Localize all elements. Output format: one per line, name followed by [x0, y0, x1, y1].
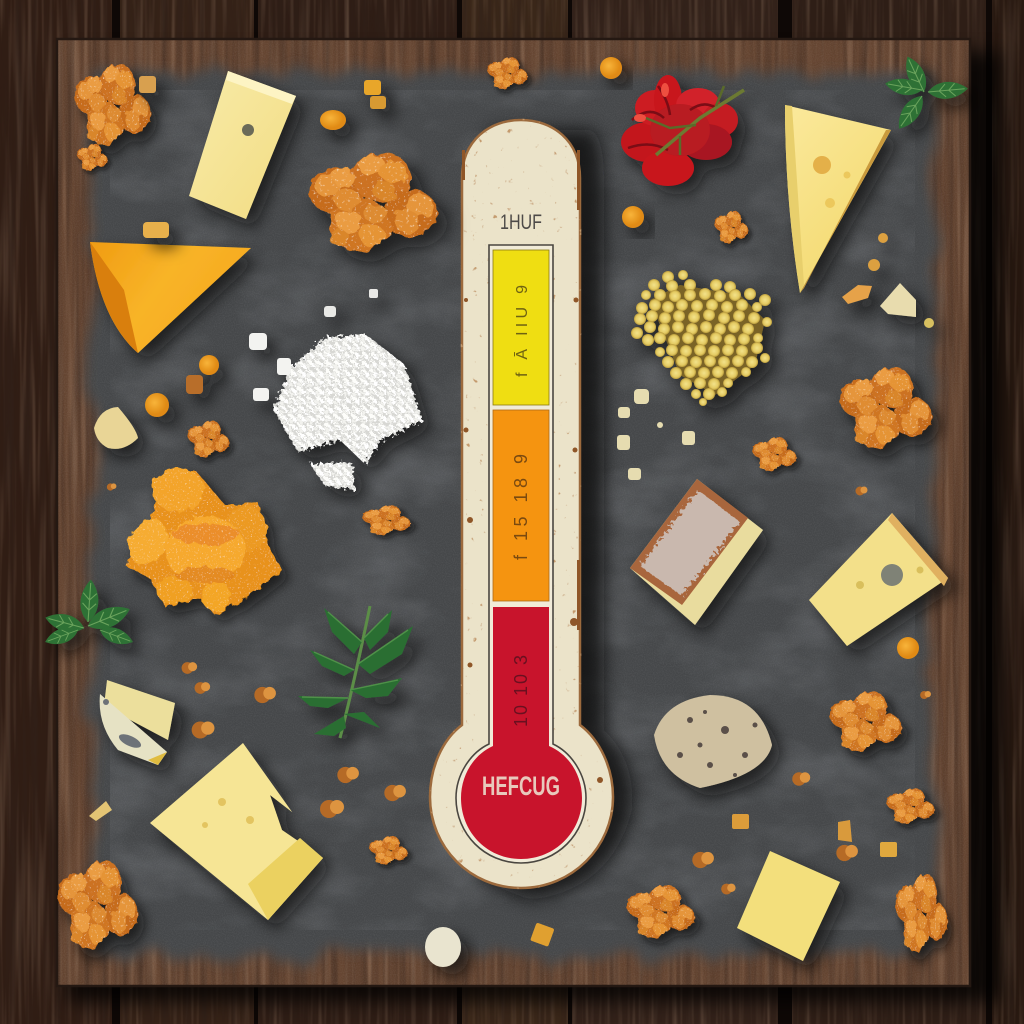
- orange zone: [493, 410, 549, 601]
- yellow zone: [493, 250, 549, 405]
- orange crumbs: right lower: [830, 691, 902, 751]
- mottled mound: [654, 695, 772, 788]
- orange bead top: [600, 57, 622, 79]
- herb: centre: [298, 606, 413, 738]
- blue cheese pieces: [100, 680, 175, 765]
- orange crumbs: small right: [715, 211, 748, 243]
- label: top: 1HUF: [500, 211, 542, 234]
- label: red scale: 10 10 3: [511, 655, 531, 727]
- thermometer shadow: [480, 130, 632, 900]
- big orange pile: [122, 468, 282, 615]
- tube outline: [456, 245, 586, 863]
- white egg: [425, 927, 461, 967]
- orange crumbs: top middle: [488, 57, 528, 89]
- orange wedge: [90, 242, 251, 353]
- orange crumbs: lower right: [896, 873, 948, 951]
- orange crumbs: far right: [887, 788, 935, 824]
- orange crumbs: right upper: [840, 366, 932, 448]
- cheese piece: right: [809, 513, 948, 646]
- orange crumbs: bottom left: [58, 860, 138, 948]
- orange beads: [139, 76, 386, 417]
- thermometer body: [430, 120, 613, 888]
- orange crumbs: small middle: [188, 420, 229, 457]
- cheese wedge: top right: [785, 105, 891, 293]
- red pepper: [621, 75, 744, 186]
- label: orange scale: f 15 18 9: [511, 454, 531, 560]
- label: bulb: HEFCUG: [482, 771, 560, 801]
- cheese block: top: [189, 71, 296, 219]
- orange bead mid: [622, 206, 644, 228]
- red zone: [461, 607, 582, 859]
- herb: left: [43, 579, 135, 649]
- label: yellow scale: f Ā IIU 9: [513, 285, 531, 377]
- small bits: left lower: [89, 483, 406, 821]
- yellow grains pile: [631, 270, 772, 406]
- cheese cube: bottom right: [737, 851, 840, 961]
- orange crumbs: below rice: [363, 505, 411, 535]
- thermometer: [430, 120, 632, 900]
- orange crumbs: lower centre: [369, 836, 408, 864]
- orange crumbs: top left: [75, 63, 151, 145]
- orange crumbs: bottom centre right: [627, 884, 695, 938]
- bread slice: [630, 479, 763, 625]
- orange crumbs: small top left: [77, 144, 108, 171]
- herb: top right: [884, 53, 969, 134]
- small bits: right lower: [692, 486, 931, 894]
- orange bead: right: [897, 637, 919, 659]
- rust edges: [462, 150, 603, 783]
- pale nugget: [94, 407, 138, 449]
- white rice pile: [249, 289, 422, 490]
- small pale bits: [617, 389, 695, 480]
- orange crumbs: upper centre: [310, 152, 438, 251]
- small nuggets: right: [842, 233, 934, 328]
- orange crumbs: right mid: [753, 437, 797, 471]
- cheese block: lower left: [150, 743, 323, 920]
- orange cube: [530, 922, 554, 947]
